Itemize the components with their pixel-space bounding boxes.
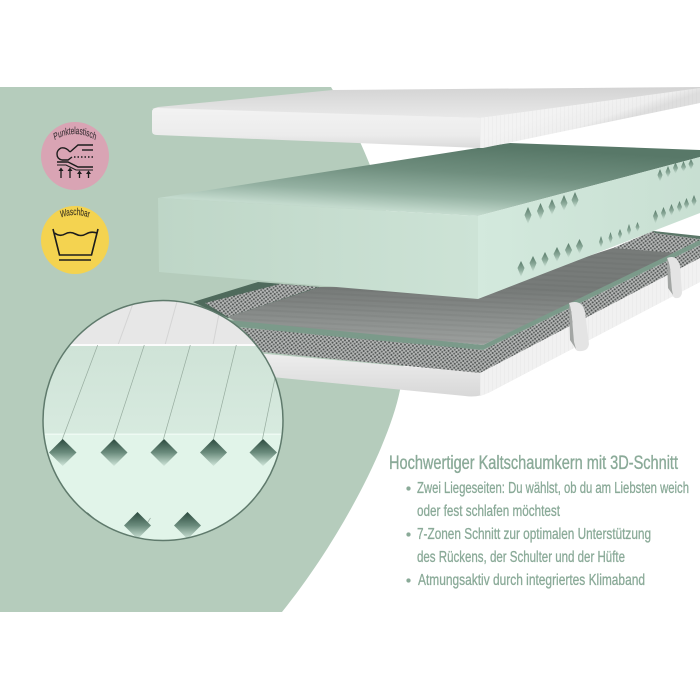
topper front side xyxy=(152,108,480,148)
bullet one: oder fest schlafen möchtest xyxy=(417,503,560,520)
diamond cuts lower left xyxy=(518,239,583,277)
bullet one xyxy=(406,480,689,520)
topper cross-section xyxy=(72,301,254,344)
grey top surface xyxy=(228,248,677,345)
mesh side band xyxy=(220,245,700,373)
green foam core block xyxy=(158,143,700,299)
back mesh strip right xyxy=(613,231,700,254)
badge: Punktelastisch xyxy=(41,122,109,190)
cut lines xyxy=(62,345,275,538)
white mattress topper xyxy=(152,87,700,148)
green edge binding xyxy=(228,240,700,350)
diamond cuts upper left xyxy=(524,192,578,224)
diamond cuts row two xyxy=(124,512,201,539)
diamond cuts lower middle xyxy=(599,222,640,248)
front face xyxy=(158,198,478,299)
side face xyxy=(478,157,700,299)
back mesh strip left xyxy=(193,282,320,318)
upper foam zone xyxy=(40,346,290,434)
diamond cuts lower right xyxy=(653,195,696,224)
badge label: Waschbar xyxy=(60,208,90,218)
badge: Waschbar xyxy=(41,206,109,274)
badge label: Punktelastisch xyxy=(53,126,96,140)
lower foam zone xyxy=(40,434,290,544)
diamond cuts row one xyxy=(49,439,277,466)
clip two xyxy=(667,257,682,298)
infographic canvas xyxy=(0,87,700,612)
topper top surface xyxy=(152,87,700,118)
bullet two xyxy=(406,526,651,566)
topper right side xyxy=(480,88,700,148)
feature text block xyxy=(389,453,689,589)
clip one xyxy=(569,302,589,351)
icon: person on elastic mattress xyxy=(57,145,93,178)
icon: wash tub xyxy=(53,229,98,260)
top surface xyxy=(158,143,700,216)
white base side xyxy=(200,258,700,396)
clipped diamond edges xyxy=(87,512,94,518)
green background panel xyxy=(0,87,406,612)
bullet two: des Rückens, der Schulter und der Hüfte xyxy=(417,549,625,566)
lens outline xyxy=(43,300,283,540)
zoom lens: foam cross-section xyxy=(40,298,290,544)
diamond cuts upper right xyxy=(658,159,694,182)
lower mattress base xyxy=(193,231,700,396)
